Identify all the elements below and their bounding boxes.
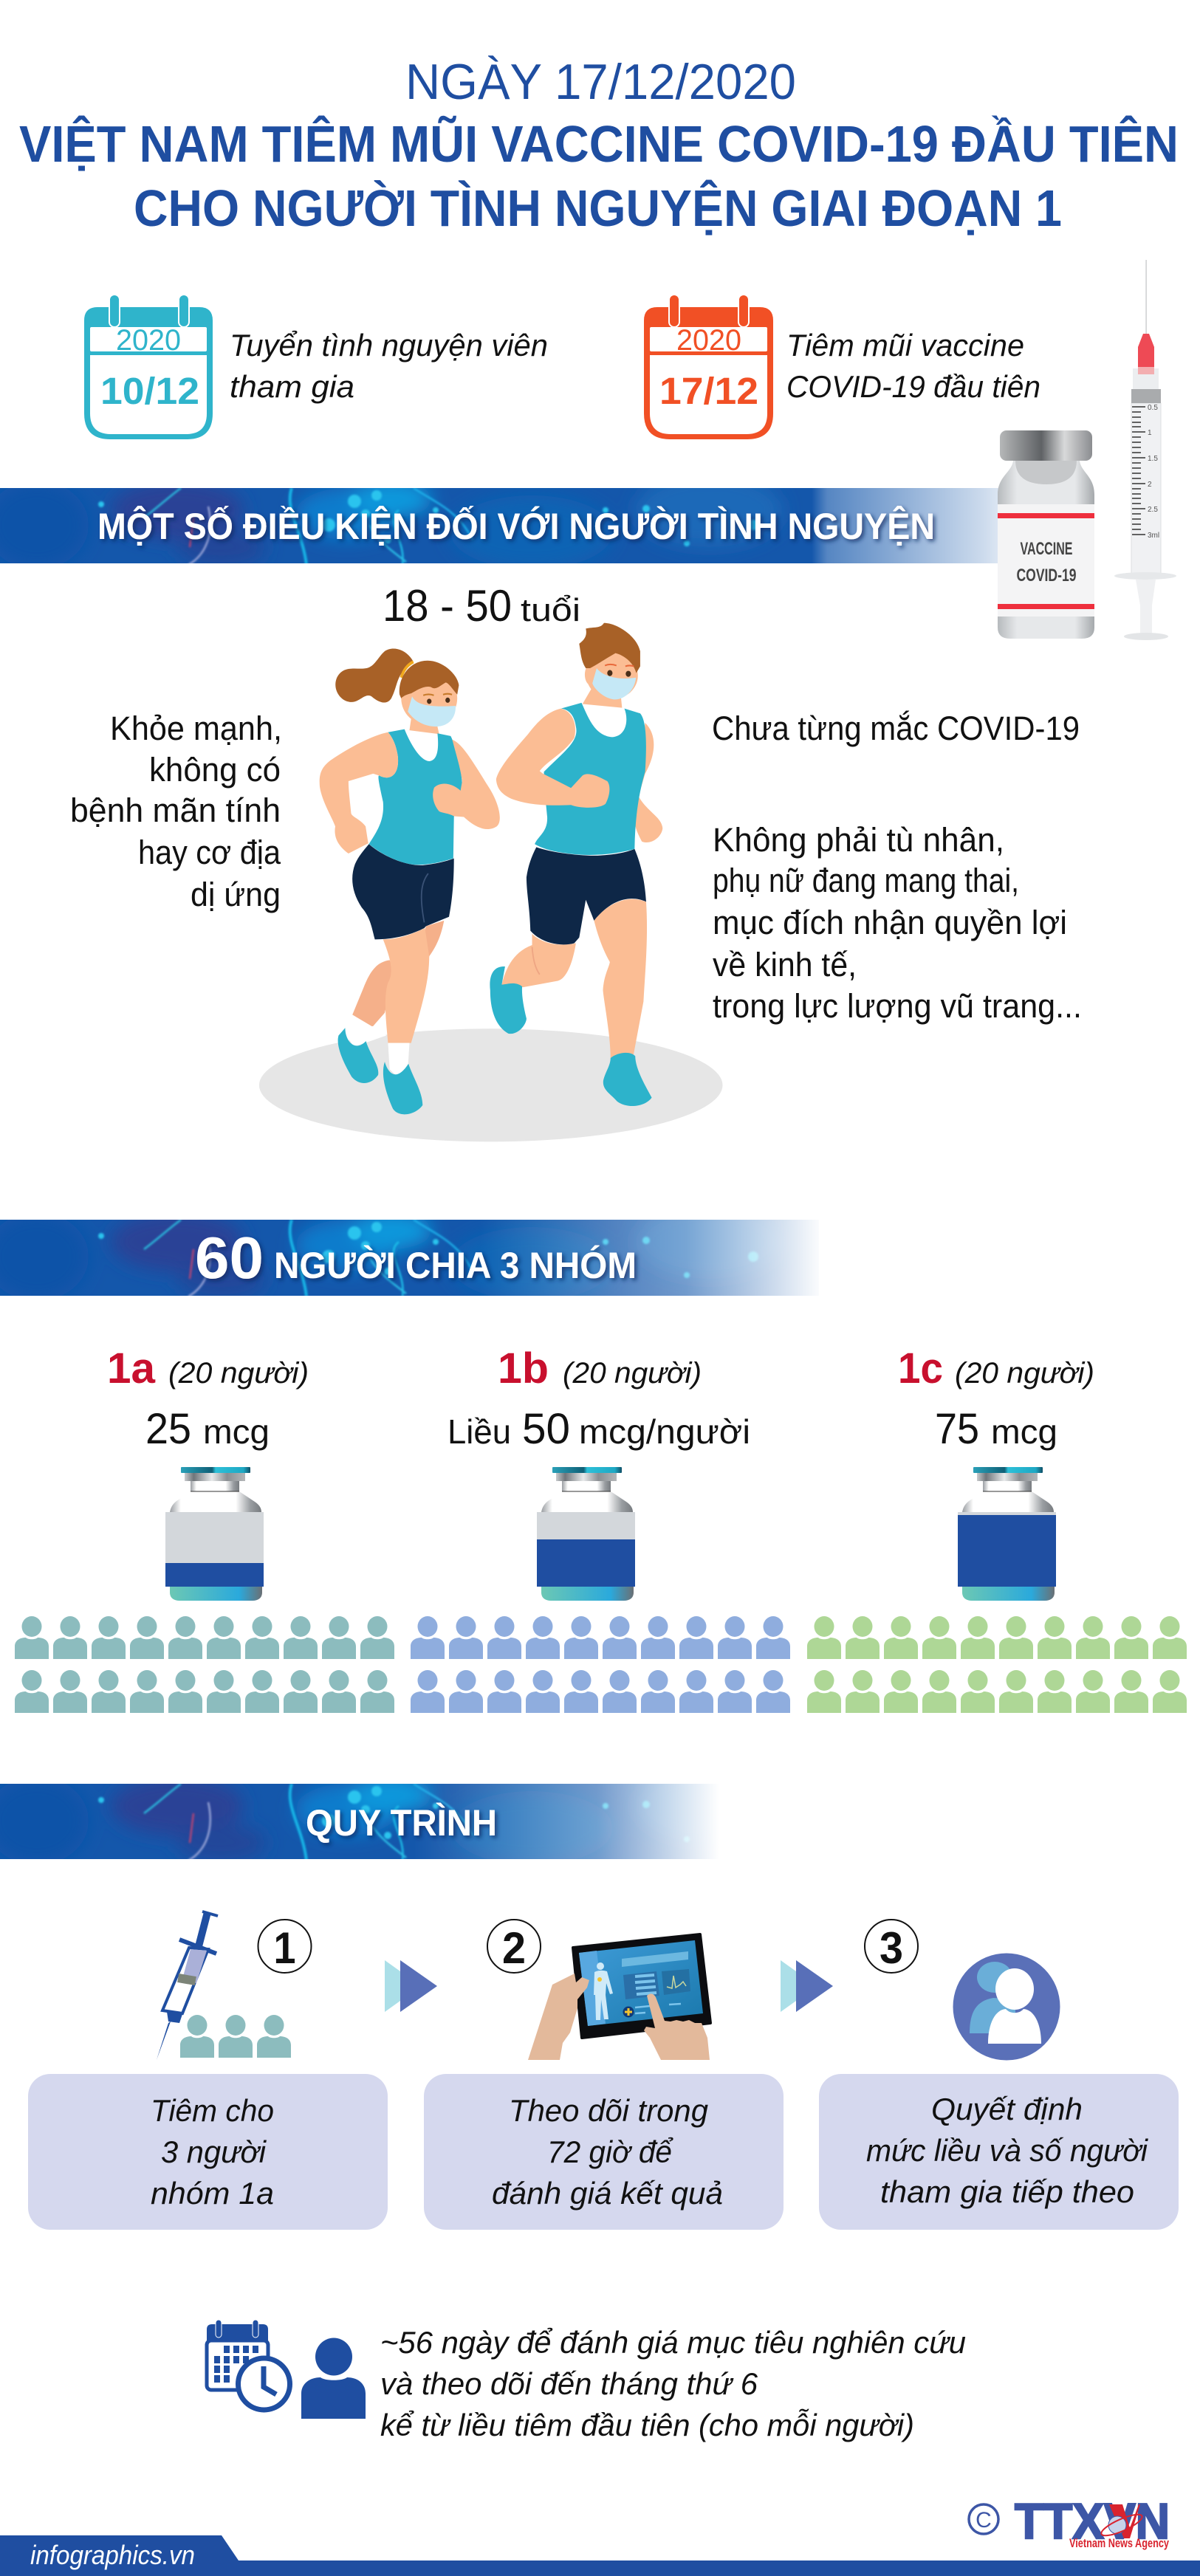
man runner (490, 623, 662, 1106)
card: step 2 (424, 2074, 784, 2230)
dose 25 mcg (145, 1405, 270, 1453)
icon: calendar 17/12: 2020 (676, 324, 741, 357)
dose 25 mcg: 25 (145, 1405, 191, 1453)
illustration: two masked runners (259, 623, 723, 1141)
icon: syringe: 3ml (1148, 532, 1159, 540)
footer bar: infographics.vn (30, 2540, 195, 2570)
step number 3 (865, 1920, 918, 1973)
people group 1c (807, 1616, 1187, 1713)
group 1a heading: (20 người) (168, 1357, 309, 1390)
dose 75 mcg: 75 (935, 1405, 979, 1453)
banner: process (0, 1784, 712, 1859)
icon: step 3 person decision (953, 1954, 1060, 2060)
dose 75 mcg: mcg (991, 1412, 1057, 1451)
banner: 60 people in 3 groups (0, 1220, 815, 1296)
arrow 1 (385, 1960, 437, 2012)
card: step 1: nhóm 1a (151, 2176, 274, 2211)
title: CHO NGƯỜI TÌNH NGUYỆN GIAI ĐOẠN 1 (134, 179, 1062, 237)
icon: vaccine vial: VACCINE (1021, 539, 1072, 559)
card: step 3 (819, 2074, 1179, 2230)
bottle 1a (165, 1467, 264, 1601)
text: other conditions: phụ nữ đang mang thai, (713, 862, 1019, 899)
text: healthy condition: bệnh mãn tính (70, 791, 281, 829)
text: first injection: COVID-19 đầu tiên (786, 369, 1040, 404)
title: NGÀY 17/12/2020 (405, 54, 796, 110)
text: recruit volunteers (230, 328, 548, 404)
text: study follow-up: và theo dõi đến tháng thứ 6 (380, 2366, 758, 2401)
icon: calendar 17/12: 17/12 (659, 370, 758, 412)
dose 75 mcg (935, 1405, 1057, 1453)
card: step 1 (28, 2074, 388, 2230)
icon: three people (180, 2015, 291, 2058)
logo: TTXVN: Vietnam News Agency (1069, 2536, 1169, 2550)
icon: syringe: 1 (1148, 429, 1152, 437)
icon: person (301, 2338, 366, 2419)
banner: conditions (0, 488, 998, 563)
icon: vaccine vial (998, 430, 1094, 639)
text: other conditions: Không phải tù nhân, (713, 821, 1004, 859)
people group 1a (15, 1616, 394, 1713)
card: step 1: Tiêm cho (151, 2093, 274, 2128)
text: age range: tuổi (521, 592, 580, 628)
text: healthy condition: Khỏe mạnh, (110, 710, 282, 747)
text: other conditions: mục đích nhận quyền lợi (713, 904, 1067, 941)
group 1c heading: (20 người) (955, 1357, 1094, 1390)
text: first injection: Tiêm mũi vaccine (786, 328, 1024, 363)
icon: calendar 10/12: 10/12 (100, 370, 199, 412)
icon: step 1 syringe (157, 1912, 218, 2060)
title (19, 54, 1179, 237)
icon: step 2 tablet and hands (528, 1934, 710, 2060)
group 1b heading: 1b (498, 1344, 549, 1392)
text: other conditions (712, 710, 1082, 1025)
group 1b heading: (20 người) (563, 1357, 702, 1390)
step number 2 (487, 1920, 541, 1973)
text: healthy condition: không có (149, 751, 281, 789)
icon: vaccine vial: COVID-19 (1016, 566, 1077, 585)
icon: calendar 10/12: 2020 (116, 324, 181, 357)
group 1b heading (498, 1344, 702, 1392)
card: step 1: 3 người (161, 2134, 267, 2169)
group 1a heading: 1a (107, 1344, 156, 1392)
text: age range (383, 581, 580, 631)
text: healthy condition: hay cơ địa (138, 834, 281, 871)
text: study follow-up (380, 2325, 966, 2442)
card: step 2: 72 giờ để (547, 2134, 674, 2169)
card: step 3: mức liều và số người (866, 2133, 1149, 2168)
dose 50 mcg (448, 1405, 750, 1453)
group 1a heading (107, 1344, 309, 1392)
icon: syringe (1114, 260, 1176, 640)
card: step 3: Quyết định (931, 2092, 1083, 2126)
icon: syringe: 0.5 (1148, 404, 1158, 412)
icon: syringe: 2 (1148, 481, 1152, 489)
text: recruit volunteers: tham gia (230, 369, 354, 404)
icon: syringe: 1.5 (1148, 455, 1158, 463)
bottle 1b (537, 1467, 635, 1601)
banner: process: QUY TRÌNH (306, 1802, 497, 1844)
icon: syringe: 2.5 (1148, 506, 1158, 514)
bottle 1c (958, 1467, 1056, 1601)
ground shadow (259, 1028, 723, 1141)
text: first injection (786, 328, 1040, 404)
card: step 3: tham gia tiếp theo (880, 2174, 1134, 2209)
logo: TTXVN: TTXVN (1015, 2493, 1170, 2549)
text: study follow-up: kể từ liều tiêm đầu tiên (cho mỗi người) (380, 2408, 914, 2442)
step number 1 (258, 1920, 312, 1973)
icon: calendar and clock (207, 2320, 289, 2410)
logo: TTXVN: C (976, 2508, 992, 2532)
card: step 2: Theo dõi trong (509, 2093, 708, 2128)
footer bar (0, 2535, 1200, 2576)
dose 50 mcg: mcg/người (579, 1412, 750, 1451)
text: study follow-up: ~56 ngày để đánh giá mục tiêu nghiên cứu (380, 2325, 966, 2360)
banner: 60 people in 3 groups: NGƯỜI CHIA 3 NHÓM (274, 1245, 637, 1286)
arrow 2 (781, 1960, 833, 2012)
text: healthy condition: dị ứng (191, 876, 281, 913)
icon: calendar 17/12 (644, 295, 773, 439)
step number 2: 2 (502, 1923, 526, 1973)
step number 3: 3 (880, 1923, 903, 1973)
text: recruit volunteers: Tuyển tình nguyện viên (230, 328, 548, 363)
dose 50 mcg: Liều (448, 1412, 511, 1451)
body chart (594, 1962, 613, 2020)
group 1c heading (898, 1344, 1094, 1392)
people group 1b (411, 1616, 790, 1713)
banner: 60 people in 3 groups: 60 (195, 1225, 264, 1291)
card: step 2: đánh giá kết quả (492, 2176, 723, 2211)
step number 1: 1 (273, 1923, 295, 1973)
icon: calendar 10/12 (84, 295, 213, 439)
text: other conditions: Chưa từng mắc COVID-19 (712, 710, 1080, 747)
woman runner (320, 649, 500, 1114)
banner: conditions: MỘT SỐ ĐIỀU KIỆN ĐỐI VỚI NGƯỜI TÌNH NGUYỆN (97, 505, 935, 547)
dose 25 mcg: mcg (203, 1412, 270, 1451)
text: other conditions: về kinh tế, (713, 946, 857, 983)
group 1c heading: 1c (898, 1344, 943, 1392)
text: age range: 18 - 50 (383, 581, 512, 631)
dose 50 mcg: 50 (522, 1405, 570, 1453)
text: other conditions: trong lực lượng vũ trang... (713, 987, 1082, 1025)
text: healthy condition (70, 710, 282, 913)
